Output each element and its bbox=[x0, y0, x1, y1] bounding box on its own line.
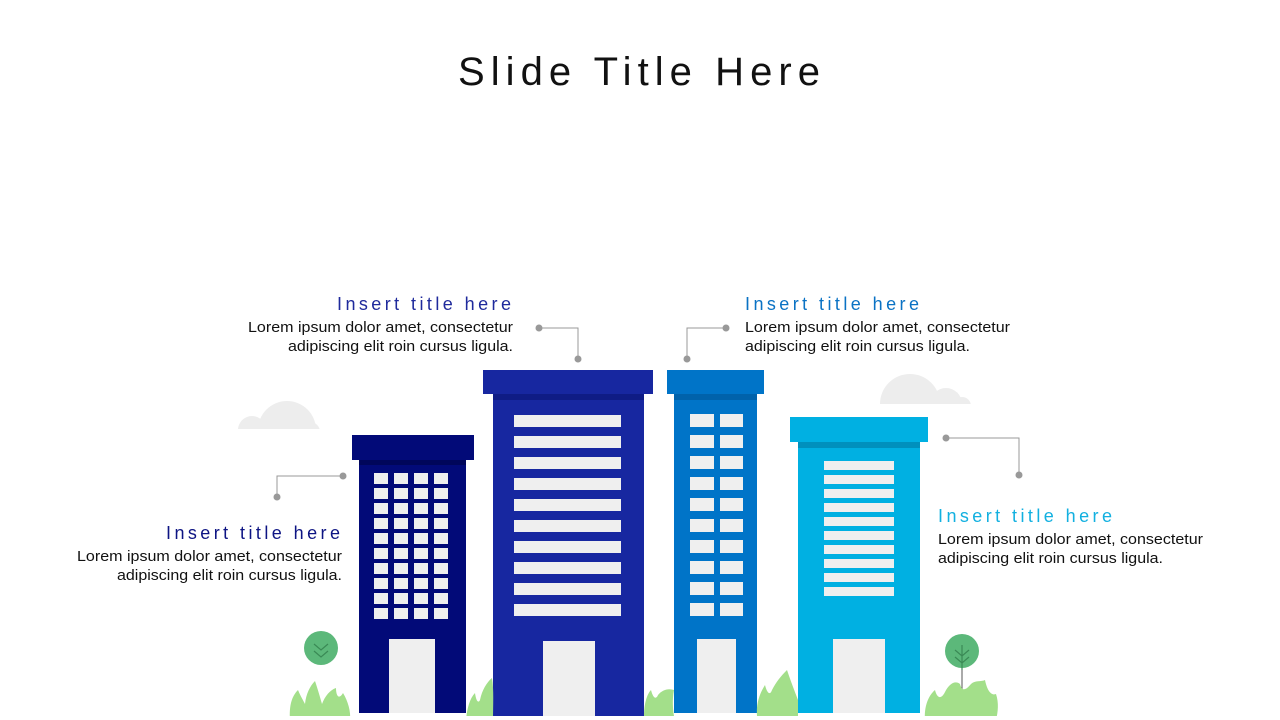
callout: top left: adipiscing elit roin cursus ligula. bbox=[288, 339, 513, 355]
building 4 bbox=[790, 417, 928, 713]
building 1 bbox=[352, 435, 474, 713]
callout: top left bbox=[248, 294, 582, 362]
callout: top right: Lorem ipsum dolor amet, consectetur bbox=[745, 320, 1010, 336]
callout: right: Lorem ipsum dolor amet, consectetur bbox=[938, 532, 1203, 548]
callout: top left: Lorem ipsum dolor amet, consectetur bbox=[248, 320, 513, 336]
callout: left bbox=[77, 472, 346, 584]
building 2 bbox=[483, 370, 653, 716]
cloud right bbox=[880, 374, 970, 404]
tree left bbox=[304, 631, 338, 665]
callout: left: adipiscing elit roin cursus ligula. bbox=[117, 568, 342, 584]
callout: right: Insert title here bbox=[938, 506, 1112, 526]
cloud left bbox=[238, 401, 320, 429]
callout: left: Lorem ipsum dolor amet, consectetur bbox=[77, 549, 342, 565]
callout: right bbox=[938, 434, 1203, 567]
title: Slide Title Here bbox=[458, 50, 820, 94]
callout: left: Insert title here bbox=[166, 523, 340, 543]
callout: top right bbox=[684, 294, 1010, 362]
building 3 bbox=[667, 370, 764, 713]
tree right bbox=[945, 634, 979, 705]
grass clumps bbox=[290, 670, 998, 720]
callout: right: adipiscing elit roin cursus ligula. bbox=[938, 551, 1163, 567]
callout: top left: Insert title here bbox=[337, 294, 511, 314]
callout: top right: adipiscing elit roin cursus ligula. bbox=[745, 339, 970, 355]
callout: top right: Insert title here bbox=[745, 294, 919, 314]
